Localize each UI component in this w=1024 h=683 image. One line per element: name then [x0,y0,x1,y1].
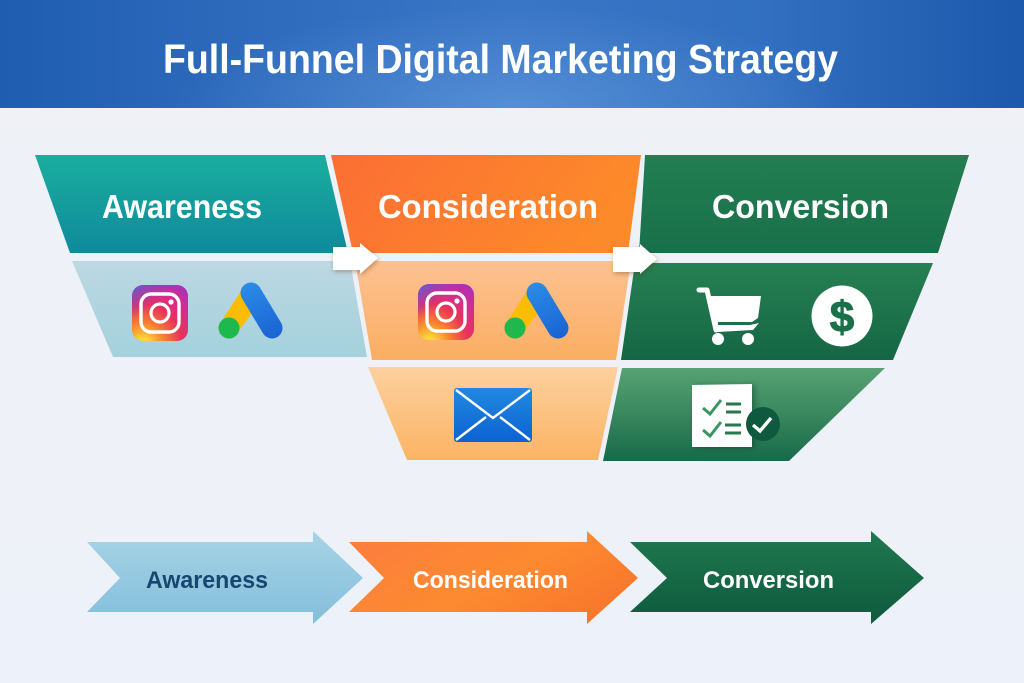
awareness heading block: Awareness [102,188,262,225]
icon: google ads [504,291,558,338]
icon: dollar coin [812,286,872,346]
arrow: consideration to conversion [613,244,657,274]
arrow: awareness to consideration [333,243,378,274]
icon: shopping cart [699,290,761,345]
awareness channels row [72,261,367,357]
conversion checklist row [603,368,885,461]
awareness heading block [35,155,348,253]
conversion heading block: Conversion [712,188,889,225]
panel: awareness column [35,155,367,357]
panel: conversion column [603,155,969,461]
icon: google ads [218,291,272,338]
consideration email row [368,367,618,460]
conversion heading block [639,155,969,253]
consideration channels row [355,261,631,360]
process arrow: awareness: Awareness [146,567,268,594]
process arrow: conversion: Conversion [703,567,834,594]
icon: email envelope [454,388,532,442]
process arrow: consideration: Consideration [413,567,568,594]
icon: checklist document [692,384,780,447]
conversion channels row [621,263,933,360]
icon: instagram [132,285,188,341]
panel: consideration column [331,155,641,460]
consideration heading block: Consideration [378,188,598,225]
consideration heading block [331,155,641,253]
icon: instagram [418,284,474,340]
header band [0,0,1024,108]
process arrow: conversion [630,531,924,624]
title: Full-Funnel Digital Marketing Strategy [163,36,838,82]
process arrow: awareness [87,531,363,624]
icon: dollar coin: $ [830,293,854,342]
process arrow: consideration [349,531,638,624]
